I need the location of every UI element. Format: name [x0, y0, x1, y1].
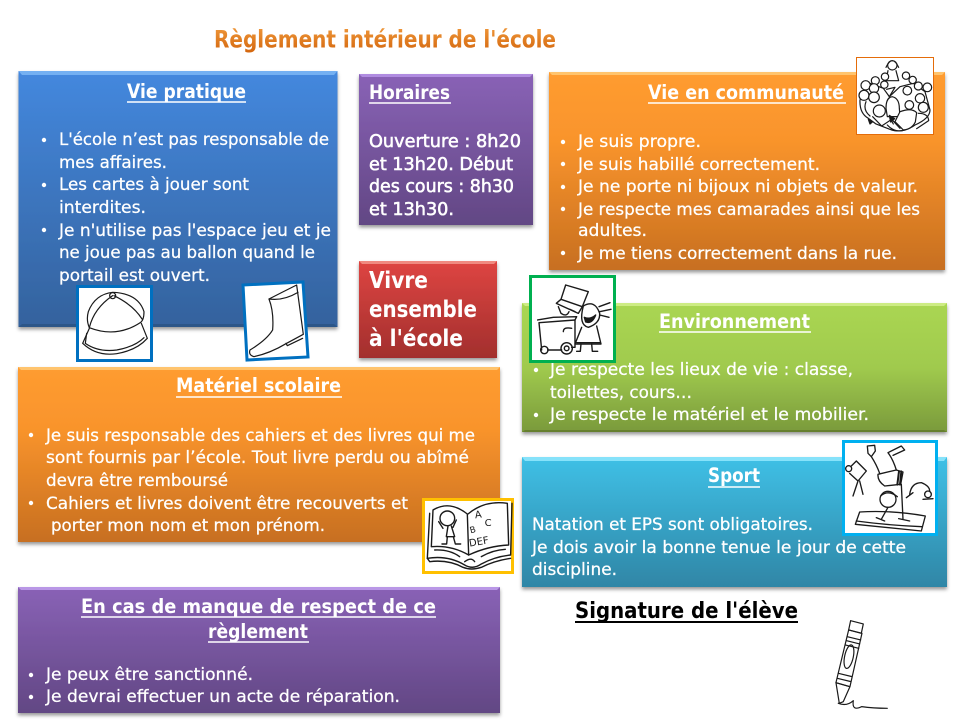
icon: open book: C — [485, 518, 492, 529]
panel: environnement — [522, 303, 947, 432]
panel: matériel scolaire — [18, 367, 500, 542]
text: horaires: des cours : 8h30 — [369, 177, 514, 197]
text: vie en communauté rules: Je respecte mes camarades ainsi que les — [577, 199, 920, 219]
panel: sport — [522, 457, 947, 587]
text: sport rules: discipline. — [532, 559, 617, 579]
heading: matériel scolaire: Matériel scolaire — [176, 374, 341, 397]
text: matériel scolaire rules: devra être remboursé — [46, 470, 228, 490]
text: environnement rules: toilettes, cours… — [550, 382, 692, 402]
text: vie pratique rules — [42, 129, 331, 285]
text: horaires: et 13h20. Début — [369, 155, 513, 175]
signature heading: Signature de l'élève — [575, 599, 798, 624]
panel: vie en communauté — [549, 72, 945, 270]
text: vie pratique rules: ne joue pas au ballon quand le — [59, 242, 315, 262]
heading: horaires: Horaires — [369, 81, 450, 104]
icon: open book: A — [474, 509, 483, 521]
text: matériel scolaire rules: Cahiers et livres doivent être recouverts et — [46, 493, 408, 513]
text: sanctions: Je peux être sanctionné. — [45, 664, 253, 684]
text: matériel scolaire rules: porter mon nom et mon prénom. — [51, 515, 325, 535]
icon: child and trash bin — [530, 276, 614, 362]
panel: manque de respect — [18, 587, 500, 713]
text: environnement rules — [534, 359, 869, 424]
text: vie en communauté rules: Je suis habillé correctement. — [577, 154, 820, 174]
heading: en cas de manque de respect: règlement — [208, 620, 308, 643]
icon: boot — [243, 282, 308, 360]
icon: open book: DEF — [468, 535, 490, 550]
text: vie pratique rules: interdites. — [59, 197, 146, 217]
text: matériel scolaire rules — [29, 425, 475, 535]
text: sanctions — [29, 664, 400, 706]
heading: vie pratique: Vie pratique — [127, 80, 246, 103]
text: horaires: Ouverture : 8h20 — [369, 132, 521, 152]
text: horaires: et 13h30. — [369, 200, 454, 220]
icon: gymnasts — [844, 442, 936, 534]
text: matériel scolaire rules: Je suis responsable des cahiers et des livres qui me — [45, 425, 475, 445]
heading: sport: Sport — [708, 464, 760, 487]
panel: vivre ensemble — [359, 261, 497, 358]
text: environnement rules: Je respecte les lieux de vie : classe, — [549, 359, 853, 379]
text: vie en communauté rules: Je ne porte ni bijoux ni objets de valeur. — [577, 176, 918, 196]
text: sanctions: Je devrai effectuer un acte de réparation. — [45, 686, 400, 706]
text: vie pratique rules: Les cartes à jouer sont — [59, 174, 249, 194]
text: vie pratique rules: L'école n’est pas responsable de — [59, 129, 329, 149]
heading: environnement: Environnement — [659, 310, 810, 333]
icon: open book: B — [469, 525, 477, 536]
icon: cap — [78, 286, 152, 360]
title: Règlement intérieur de l'école — [214, 26, 556, 54]
heading: vivre ensemble à l'école: ensemble — [369, 297, 477, 323]
heading: vie en communauté: Vie en communauté — [648, 81, 844, 104]
heading: vivre ensemble à l'école — [369, 268, 477, 352]
text: environnement rules: Je respecte le matériel et le mobilier. — [549, 404, 869, 424]
icon: open book — [424, 500, 512, 572]
panel: horaires — [359, 74, 533, 225]
text: vie en communauté rules: Je suis propre. — [577, 131, 701, 151]
text: vie pratique rules: Je n'utilise pas l'espace jeu et je — [58, 220, 331, 240]
heading: vivre ensemble à l'école: Vivre — [369, 268, 428, 294]
heading: en cas de manque de respect — [81, 595, 436, 643]
text: vie pratique rules: portail est ouvert. — [59, 265, 210, 285]
text: vie pratique rules: mes affaires. — [59, 152, 167, 172]
text: vie en communauté rules — [561, 131, 920, 263]
text: sport rules: Je dois avoir la bonne tenue le jour de cette — [531, 537, 906, 557]
heading: vivre ensemble à l'école: à l'école — [369, 326, 463, 352]
panel: vie pratique — [18, 71, 338, 327]
text: sport rules: Natation et EPS sont obligatoires. — [532, 514, 813, 534]
heading: en cas de manque de respect: En cas de manque de respect de ce — [81, 595, 436, 618]
text: vie en communauté rules: Je me tiens correctement dans la rue. — [577, 243, 897, 263]
text: sport rules — [531, 514, 906, 579]
icon: group of children — [856, 58, 934, 134]
text: matériel scolaire rules: sont fournis par l’école. Tout livre perdu ou abîmé — [46, 447, 469, 467]
text: vie en communauté rules: adultes. — [578, 220, 647, 240]
icon: crayon — [836, 621, 887, 708]
text: horaires — [369, 132, 521, 220]
